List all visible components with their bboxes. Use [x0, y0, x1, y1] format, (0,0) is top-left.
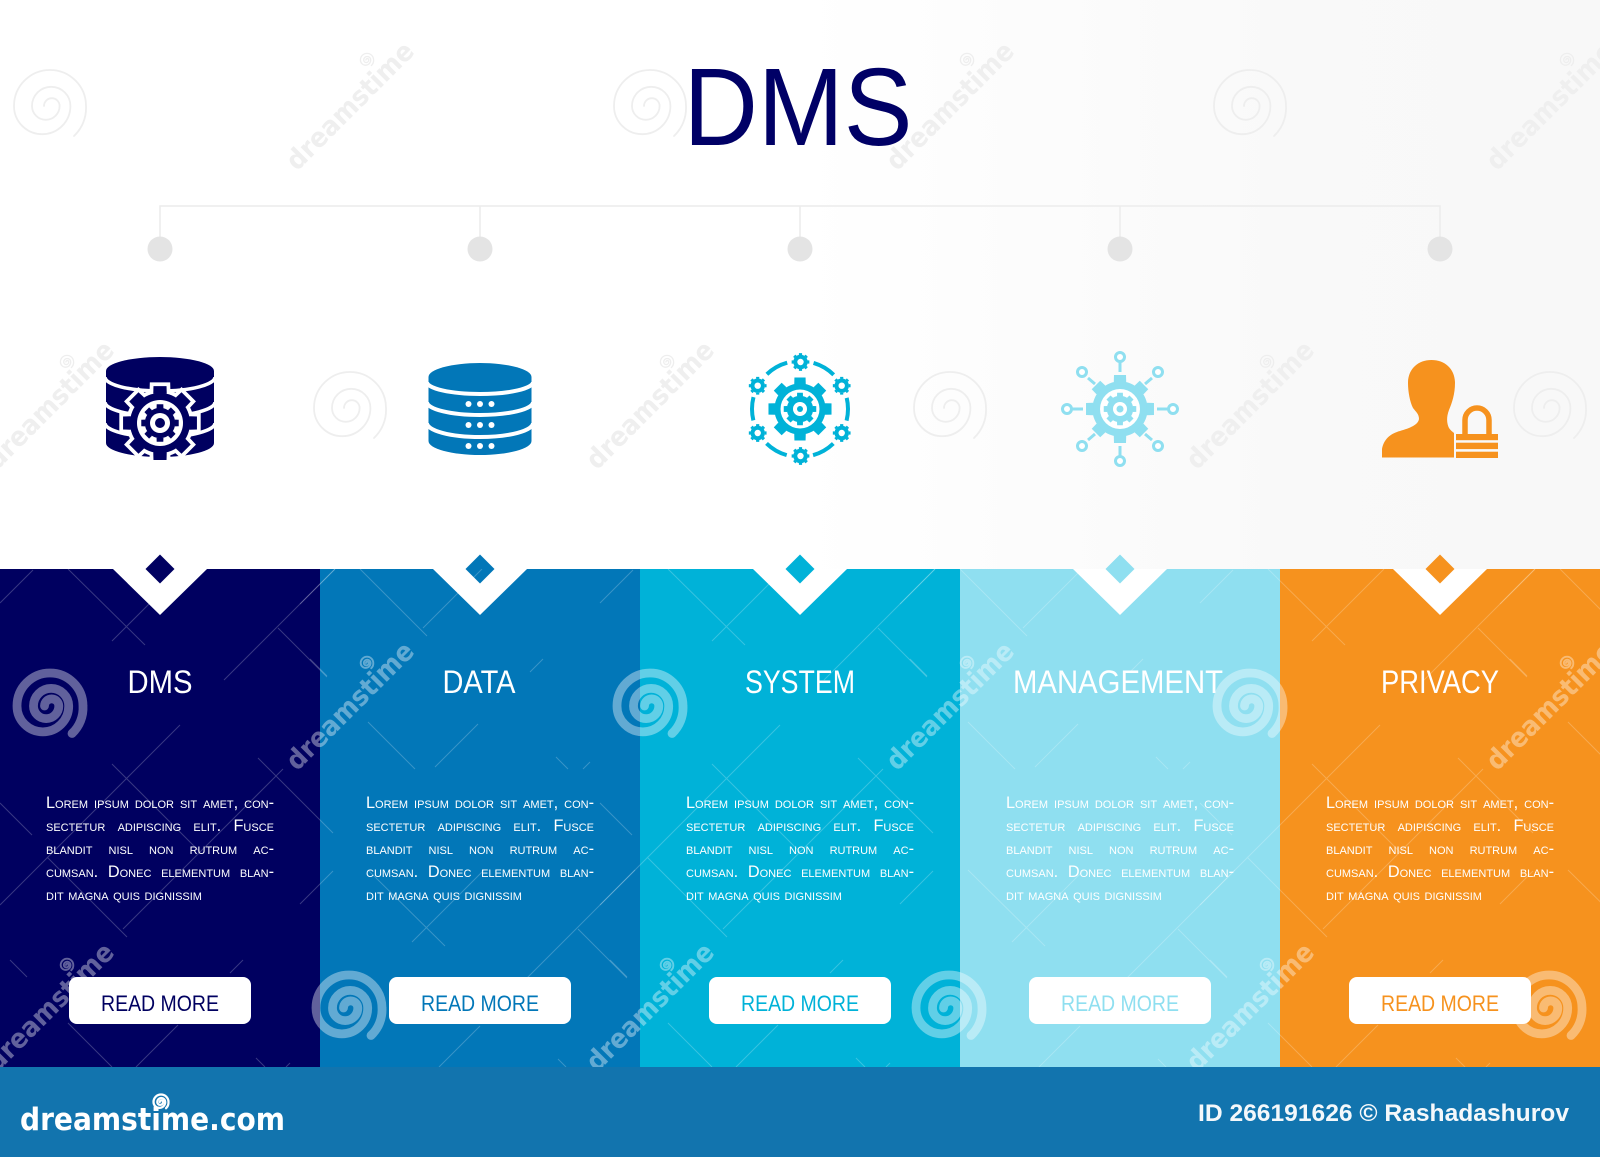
footer bar: [0, 1067, 1600, 1157]
icon: management gear network: [1062, 352, 1178, 466]
body text: DATA: Lorem ipsum dolor sit amet, con-: [366, 794, 594, 812]
connector tree: [148, 206, 1452, 262]
background watermark on white area: dreamstime: [580, 335, 721, 476]
background watermark on white area: [0, 36, 1600, 476]
title: DMS: [684, 46, 912, 169]
body text: DMS: [46, 794, 274, 904]
body text: DATA: blandit nisl non rutrum ac-: [366, 840, 594, 858]
body text: SYSTEM: Lorem ipsum dolor sit amet, con-: [686, 794, 914, 812]
body text: PRIVACY: dit magna quis dignissim: [1326, 886, 1482, 904]
panel: DATA: [320, 554, 640, 1067]
body text: DATA: [366, 794, 594, 904]
panel: SYSTEM: SYSTEM: [745, 664, 855, 700]
body text: SYSTEM: sectetur adipiscing elit. Fusce: [686, 817, 914, 835]
background watermark on white area: dreamstime: [280, 36, 421, 177]
panel: MANAGEMENT: MANAGEMENT: [1013, 664, 1223, 700]
icon: person with padlock: [1382, 360, 1498, 458]
panel: MANAGEMENT: [960, 554, 1280, 1067]
footer credit: ID 266191626 © Rashadashurov: [1198, 1100, 1570, 1127]
body text: DMS: Lorem ipsum dolor sit amet, con-: [46, 794, 274, 812]
panel: DMS: DMS: [128, 664, 192, 700]
panel: SYSTEM: [640, 554, 960, 1067]
icon: database with gear: [105, 357, 215, 460]
body text: PRIVACY: cumsan. Donec elementum blan-: [1326, 863, 1554, 881]
footer logo: dreamstime.com: [20, 1102, 285, 1138]
body text: MANAGEMENT: Lorem ipsum dolor sit amet, con-: [1006, 794, 1234, 812]
body text: PRIVACY: [1326, 794, 1554, 904]
icon: system gears ring: [749, 353, 851, 465]
body text: MANAGEMENT: [1006, 794, 1234, 904]
body text: DMS: blandit nisl non rutrum ac-: [46, 840, 274, 858]
panel: DATA: DATA: [442, 664, 516, 700]
panel: DMS: [0, 554, 320, 1067]
panel: PRIVACY: PRIVACY: [1381, 664, 1499, 700]
panel: PRIVACY: [1280, 554, 1600, 1067]
body text: PRIVACY: sectetur adipiscing elit. Fusce: [1326, 817, 1554, 835]
body text: MANAGEMENT: dit magna quis dignissim: [1006, 886, 1162, 904]
watermark over panels: dreamstime: [1180, 937, 1321, 1078]
body text: MANAGEMENT: sectetur adipiscing elit. Fusce: [1006, 817, 1234, 835]
body text: DATA: sectetur adipiscing elit. Fusce: [366, 817, 594, 835]
icon: database stack: [427, 363, 533, 455]
watermark over panels: dreamstime: [280, 636, 421, 777]
body text: SYSTEM: cumsan. Donec elementum blan-: [686, 863, 914, 881]
panel: SYSTEM: READ MORE: [741, 991, 859, 1016]
body text: SYSTEM: [686, 794, 914, 904]
panel: PRIVACY: READ MORE: [1381, 991, 1499, 1016]
panel: DATA: READ MORE: [421, 991, 539, 1016]
body text: PRIVACY: Lorem ipsum dolor sit amet, con-: [1326, 794, 1554, 812]
body text: DATA: dit magna quis dignissim: [366, 886, 522, 904]
body text: DATA: cumsan. Donec elementum blan-: [366, 863, 594, 881]
body text: DMS: dit magna quis dignissim: [46, 886, 202, 904]
panel: DMS: READ MORE: [101, 991, 219, 1016]
body text: MANAGEMENT: blandit nisl non rutrum ac-: [1006, 840, 1234, 858]
watermark over panels: dreamstime: [580, 937, 721, 1078]
body text: PRIVACY: blandit nisl non rutrum ac-: [1326, 840, 1554, 858]
background watermark on white area: dreamstime: [880, 36, 1021, 177]
body text: MANAGEMENT: cumsan. Donec elementum blan-: [1006, 863, 1234, 881]
body text: DMS: cumsan. Donec elementum blan-: [46, 863, 274, 881]
body text: SYSTEM: blandit nisl non rutrum ac-: [686, 840, 914, 858]
watermark over panels: [0, 569, 1600, 1078]
background watermark on white area: dreamstime: [1180, 335, 1321, 476]
body text: DMS: sectetur adipiscing elit. Fusce: [46, 817, 274, 835]
panel: MANAGEMENT: READ MORE: [1061, 991, 1179, 1016]
body text: SYSTEM: dit magna quis dignissim: [686, 886, 842, 904]
watermark over panels: dreamstime: [880, 636, 1021, 777]
